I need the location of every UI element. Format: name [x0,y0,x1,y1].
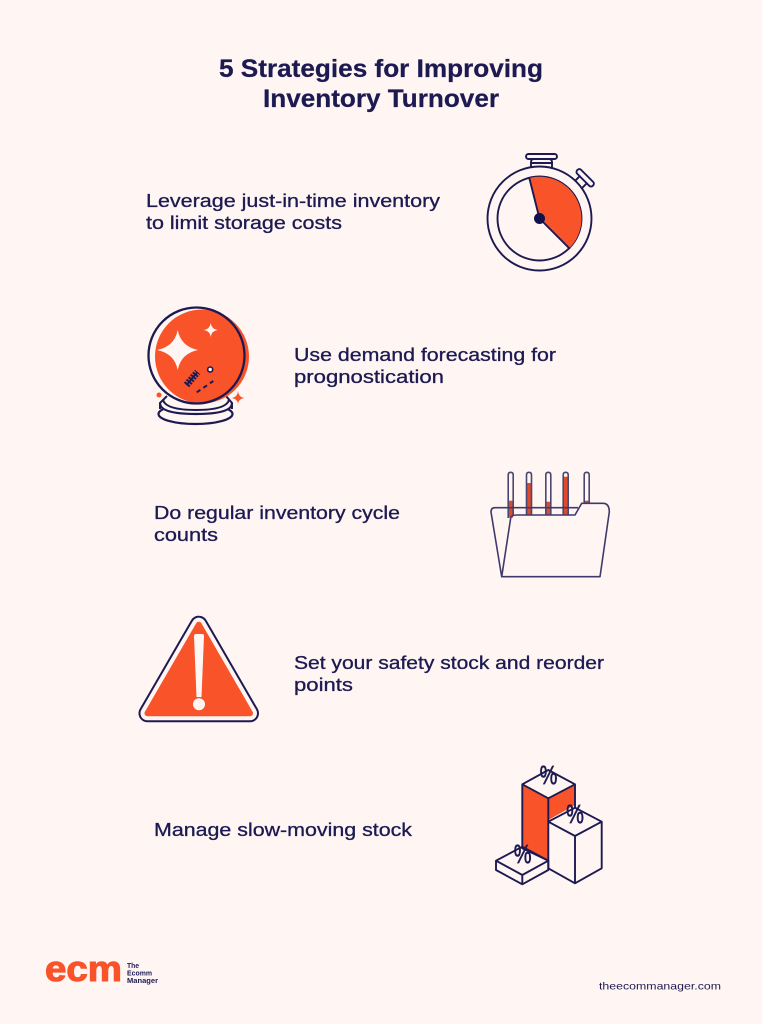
title [219,55,543,113]
icon: stopwatch [488,154,595,270]
logo: Manager [127,976,158,985]
strategy 1 text: Leverage just-in-time inventory [146,191,440,211]
icon: percent bars [496,760,602,884]
title: 5 Strategies for Improving [219,55,543,83]
logo: The [127,961,139,970]
icon: crystal ball [148,308,249,424]
strategy 2 text: prognostication [294,367,444,387]
logo: ecm [45,948,122,989]
icon: warning triangle [148,625,250,713]
strategy 3 text [154,503,400,545]
title: Inventory Turnover [263,85,499,113]
strategy 3 text: counts [154,525,218,545]
strategy 1 text [146,191,440,233]
strategy 3 text: Do regular inventory cycle [154,503,400,523]
strategy 1 text: to limit storage costs [146,213,342,233]
icon: percent bars: % [540,760,557,790]
strategy 4 text: Set your safety stock and reorder [294,653,604,673]
strategy 2 text: Use demand forecasting for [294,345,556,365]
website url: theecommanager.com [599,980,721,992]
strategy 5 text: Manage slow-moving stock [154,820,413,840]
icon: percent bars: % [514,839,532,869]
strategy 2 text [294,345,556,387]
strategy 4 text: points [294,675,353,695]
strategy 4 text [294,653,604,695]
icon: percent bars: % [566,799,584,829]
logo: Ecomm [127,968,152,978]
logo [45,948,158,989]
icon: folder with tubes [491,472,609,577]
